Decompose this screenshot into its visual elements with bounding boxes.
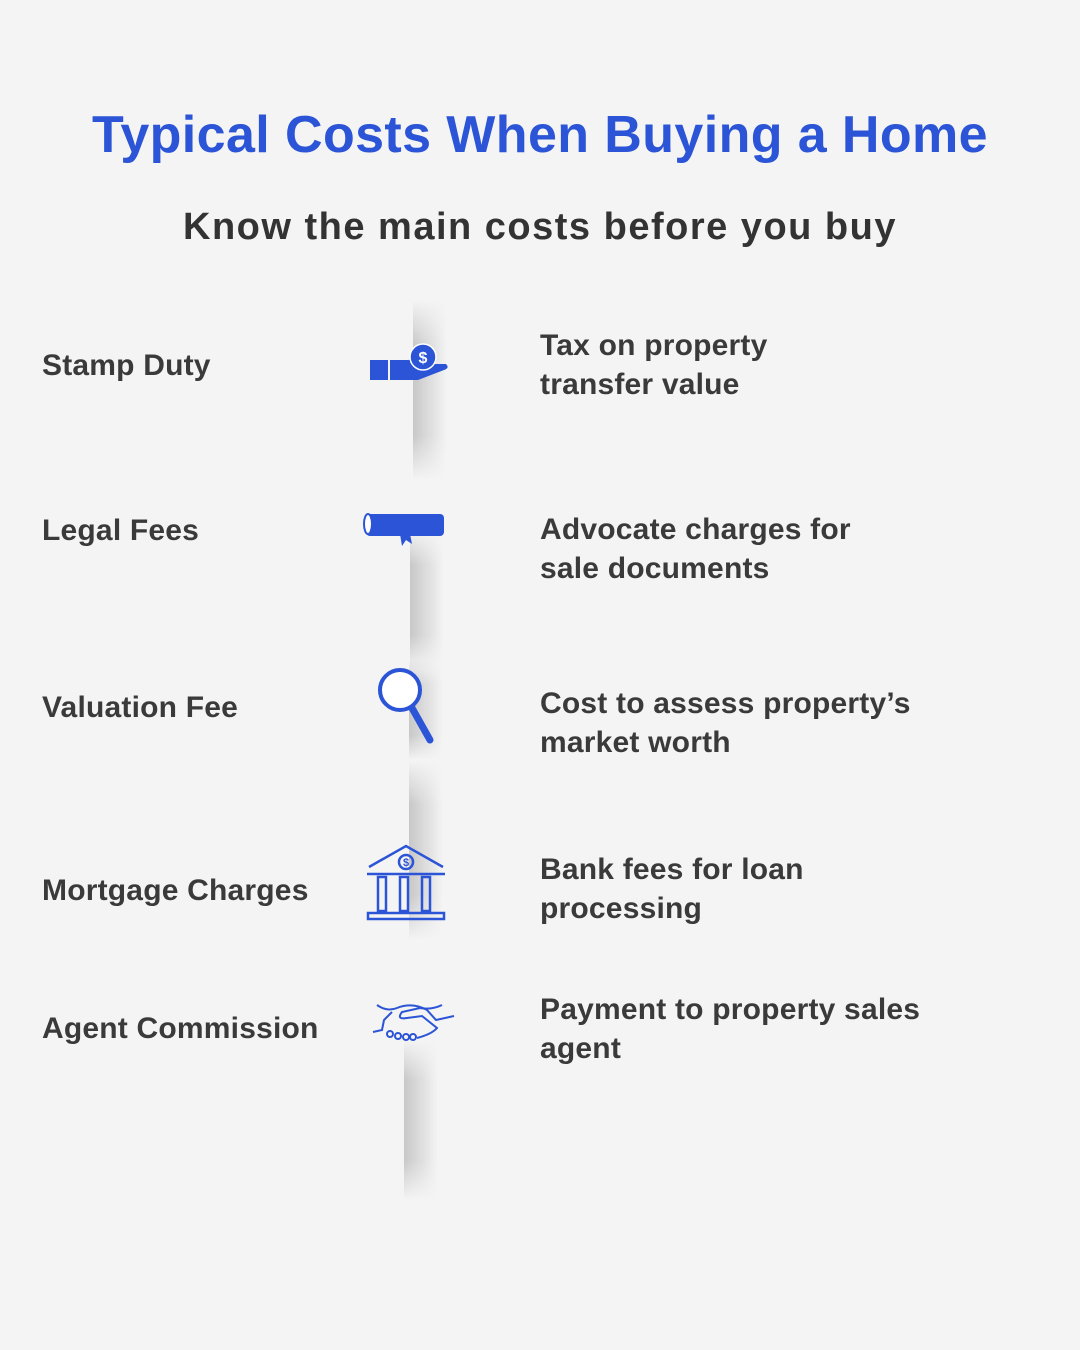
row: stamp duty: Stamp Duty [42, 349, 211, 382]
row: agent commission: Agent Commission [42, 1012, 319, 1045]
row: mortgage charges [42, 844, 804, 925]
icon: magnifier [378, 668, 434, 744]
row: agent commission [42, 993, 920, 1065]
icon: handshake [372, 1004, 454, 1041]
row: valuation fee [42, 668, 911, 759]
row: valuation fee: market worth [540, 726, 731, 759]
row: mortgage charges: Mortgage Charges [42, 874, 309, 907]
icon: bank: $ [403, 857, 409, 869]
row: mortgage charges: processing [540, 892, 702, 925]
icon: bank [366, 844, 446, 920]
row: legal fees: sale documents [540, 552, 770, 585]
row: valuation fee: Valuation Fee [42, 691, 238, 724]
row: stamp duty: transfer value [540, 368, 740, 401]
row: legal fees [42, 513, 851, 585]
row: agent commission: agent [540, 1032, 621, 1065]
row: agent commission: Payment to property sales [540, 993, 920, 1026]
row: mortgage charges: Bank fees for loan [540, 853, 804, 886]
subtitle: Know the main costs before you buy [183, 206, 897, 248]
row: legal fees: Legal Fees [42, 514, 199, 547]
icon: hand with coin [370, 343, 448, 380]
row: legal fees: Advocate charges for [540, 513, 851, 546]
icon: scroll [363, 513, 444, 546]
row: stamp duty [42, 329, 768, 401]
icon: hand with coin: $ [419, 350, 428, 367]
title: Typical Costs When Buying a Home [92, 106, 988, 164]
row: stamp duty: Tax on property [540, 329, 767, 362]
row: valuation fee: Cost to assess property’s [540, 687, 911, 720]
